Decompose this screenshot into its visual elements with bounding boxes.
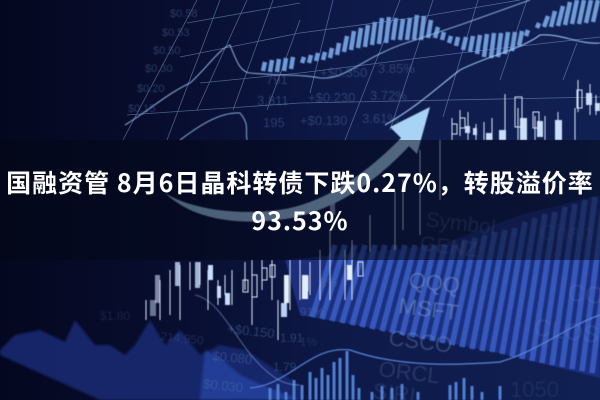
ticker symbols: Symbol [424, 208, 497, 239]
numeric ticker labels: $0.58 [170, 8, 198, 20]
numeric ticker labels: 3,811 [257, 93, 289, 108]
numeric ticker labels: 1.91 [280, 331, 304, 345]
numeric ticker labels: +$0.150 [227, 321, 275, 341]
dark title band [0, 140, 600, 260]
title: 93.53% [251, 202, 349, 238]
numeric ticker labels [100, 8, 415, 395]
numeric ticker labels: 8% [320, 276, 338, 290]
perspective grid lines [123, 0, 600, 140]
numeric ticker labels: 3.61% [362, 111, 399, 126]
bottom-left dim blue bars [0, 320, 300, 400]
numeric ticker labels: 3.85% [378, 61, 415, 76]
numeric ticker labels: 1% [300, 335, 318, 349]
numeric ticker labels: 791 [266, 72, 288, 87]
numeric ticker labels: 91% [300, 305, 324, 319]
ticker symbols: QQQ [407, 267, 461, 298]
numeric ticker labels: $0.30 [145, 63, 173, 75]
numeric ticker labels: $0.15 [128, 103, 156, 115]
ticker symbols [371, 208, 600, 400]
numeric ticker labels: +$0.230 [308, 90, 355, 105]
title [6, 164, 594, 238]
numeric ticker labels: 214,950 [160, 329, 205, 348]
numeric ticker labels: 3.72% [370, 88, 407, 103]
ticker symbols: GENZ [418, 232, 479, 262]
numeric ticker labels: $0.20 [137, 83, 165, 95]
candlesticks [146, 80, 600, 340]
bottom small light-blue bars [270, 351, 500, 400]
numeric ticker labels: $0.53 [162, 27, 190, 39]
ticker symbols: MSFT [397, 293, 460, 325]
ticker symbols: Chan [540, 220, 593, 245]
numeric ticker labels: $1.80 [100, 309, 130, 323]
title: 国融资管 8月6日晶科转债下跌0.27%，转股溢价率 [6, 164, 594, 200]
numeric ticker labels: 1.79 [273, 360, 297, 374]
bottom-right blue slanted bars [285, 195, 600, 378]
numeric ticker labels: $0.030 [203, 376, 244, 395]
trend lines [125, 0, 600, 388]
ticker symbols: CSCO [387, 325, 454, 358]
large curved arrow [165, 107, 430, 222]
numeric ticker labels: $0.080 [212, 348, 253, 367]
top wave volume bars [263, 0, 598, 72]
ticker symbols: ORCL [377, 356, 441, 388]
numeric ticker labels: +$0.350 [320, 65, 367, 80]
numeric ticker labels: +$0.130 [300, 113, 347, 128]
numeric ticker labels: $0.50 [153, 45, 181, 57]
numeric ticker labels: 195 [263, 115, 285, 130]
